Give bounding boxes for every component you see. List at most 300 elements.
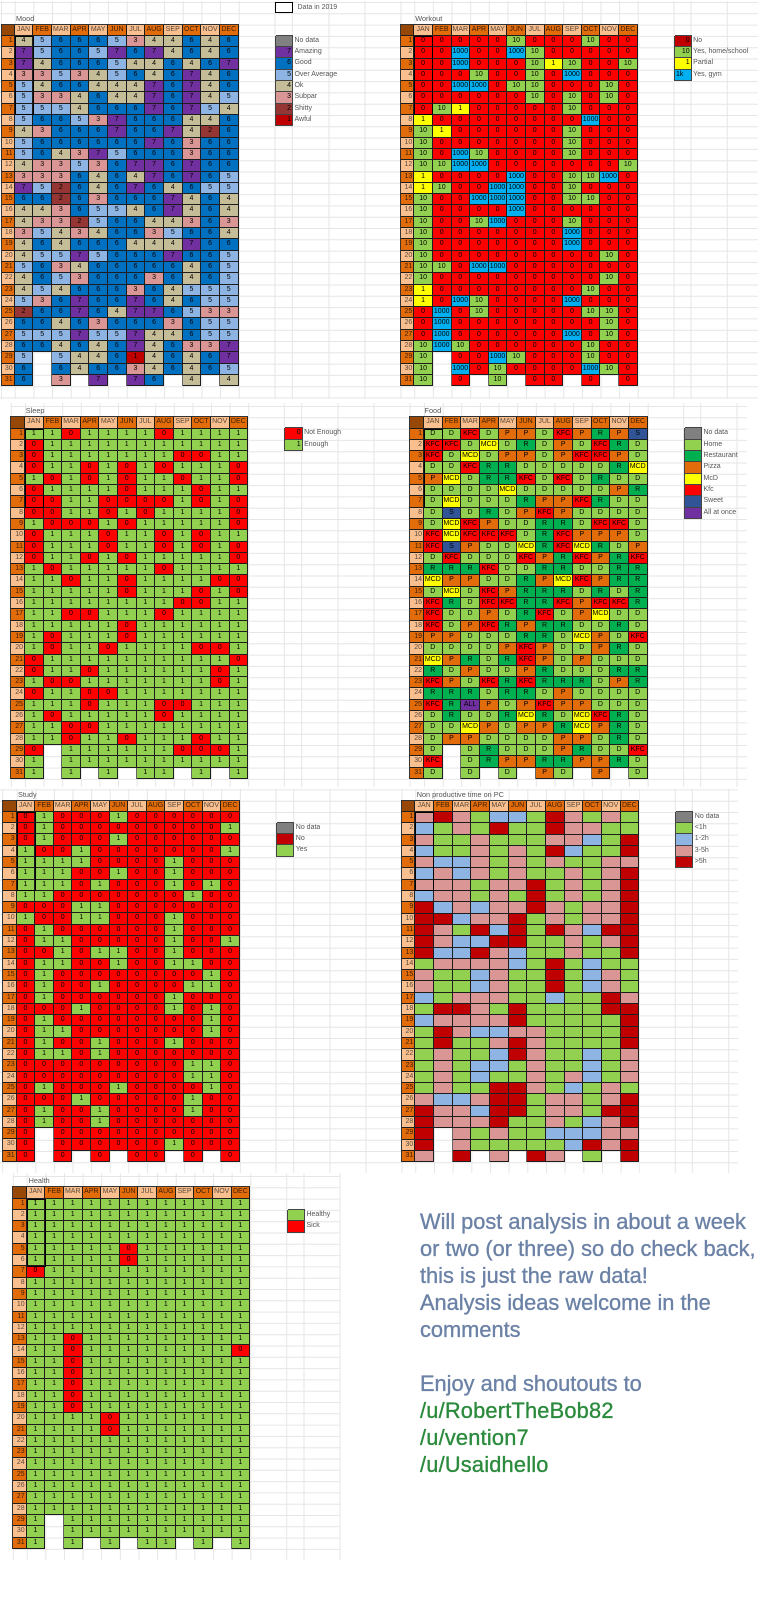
health calendar table: 1 xyxy=(89,1493,93,1500)
mood calendar table: 6 xyxy=(115,353,119,360)
health calendar table: 1 xyxy=(108,1267,112,1274)
food calendar table: MCD xyxy=(462,723,478,730)
workout calendar table: 10 xyxy=(568,195,576,202)
study calendar table: 0 xyxy=(191,824,195,831)
health calendar table: 1 xyxy=(183,1380,186,1387)
food calendar table: 29 xyxy=(414,746,422,753)
health calendar table: 1 xyxy=(238,1448,242,1455)
health calendar table: 1 xyxy=(127,1471,131,1478)
food calendar table: R xyxy=(617,554,622,561)
health calendar table: 1 xyxy=(145,1426,149,1433)
mood calendar table: 6 xyxy=(96,139,100,146)
legend: mood: Amazing xyxy=(294,48,322,55)
health calendar table: 1 xyxy=(145,1290,149,1297)
health calendar table: 1 xyxy=(201,1527,205,1534)
mood calendar table: 6 xyxy=(115,184,119,191)
sleep calendar table: 1 xyxy=(143,735,147,742)
health calendar table: DEC xyxy=(233,1188,248,1195)
workout calendar table: 0 xyxy=(496,37,499,44)
health calendar table: 1 xyxy=(201,1256,205,1263)
food calendar table: 20 xyxy=(414,644,422,651)
food calendar table: R xyxy=(598,497,603,504)
health calendar table: 1 xyxy=(201,1369,205,1376)
workout calendar table: 10 xyxy=(605,365,613,372)
food calendar table: D xyxy=(449,463,454,470)
workout calendar table: 1000 xyxy=(434,342,449,349)
workout calendar table: 0 xyxy=(458,139,462,146)
workout calendar table: 1 xyxy=(408,37,412,44)
study calendar table: 0 xyxy=(116,982,120,989)
study calendar table: 25 xyxy=(7,1084,15,1091)
workout calendar table: 0 xyxy=(570,252,574,259)
food calendar table: APR xyxy=(481,418,496,425)
workout calendar table: 0 xyxy=(514,60,518,67)
workout calendar table: 0 xyxy=(607,139,611,146)
mood calendar table xyxy=(0,24,239,386)
food calendar table: P xyxy=(486,723,491,730)
workout calendar table: 0 xyxy=(607,297,611,304)
health calendar table: 1 xyxy=(52,1346,56,1353)
legend: workout: Yes, home/school xyxy=(693,48,748,55)
food calendar table: R xyxy=(430,667,435,674)
health calendar table: 1 xyxy=(238,1358,242,1365)
study calendar table: 0 xyxy=(191,858,195,865)
workout calendar table: 0 xyxy=(589,48,593,55)
food calendar table: D xyxy=(561,463,566,470)
mood calendar table: 5 xyxy=(227,93,231,100)
food calendar table: KFC xyxy=(556,543,570,550)
study calendar table: 0 xyxy=(209,1039,213,1046)
health calendar table: 1 xyxy=(220,1346,224,1353)
health calendar table: 1 xyxy=(71,1267,75,1274)
non productive time calendar table: 11 xyxy=(406,926,413,933)
legend: food: Restaurant xyxy=(703,452,738,459)
mood calendar table: 3 xyxy=(59,93,63,100)
sleep calendar table: 1 xyxy=(162,633,166,640)
mood calendar table: 6 xyxy=(96,274,100,281)
workout calendar table: 0 xyxy=(477,252,481,259)
food calendar table: P xyxy=(579,656,584,663)
workout calendar table: 0 xyxy=(570,37,574,44)
sleep calendar table: 1 xyxy=(199,656,203,663)
health calendar table: 1 xyxy=(164,1426,168,1433)
mood calendar table: 7 xyxy=(152,308,156,315)
workout calendar table: 1 xyxy=(421,184,425,191)
study calendar table: 0 xyxy=(154,1118,158,1125)
mood calendar table: 21 xyxy=(5,263,13,270)
study calendar table: 0 xyxy=(135,892,139,899)
food calendar table: R xyxy=(542,667,547,674)
mood calendar table: 6 xyxy=(189,48,193,55)
health calendar table: 8 xyxy=(21,1279,25,1286)
mood calendar table: 3 xyxy=(9,60,13,67)
mood calendar table: 6 xyxy=(59,37,63,44)
health calendar table: 1 xyxy=(52,1211,56,1218)
sleep calendar table: 0 xyxy=(125,588,129,595)
health calendar table: 1 xyxy=(183,1233,186,1240)
workout calendar table: 0 xyxy=(496,173,499,180)
mood calendar table: 6 xyxy=(115,139,119,146)
mood calendar table: 6 xyxy=(59,82,63,89)
health calendar table: 1 xyxy=(183,1335,186,1342)
study calendar table: 1 xyxy=(42,1039,46,1046)
study calendar table: 21 xyxy=(7,1039,15,1046)
study calendar table: 1 xyxy=(42,1084,46,1091)
mood calendar table: 7 xyxy=(78,297,81,304)
study calendar table: 0 xyxy=(98,971,102,978)
food calendar table: KFC xyxy=(575,554,589,561)
food calendar table: R xyxy=(505,678,510,685)
sleep calendar table: 1 xyxy=(125,656,129,663)
mood calendar table: 4 xyxy=(9,71,13,78)
health calendar table: 0 xyxy=(71,1369,75,1376)
sleep calendar table: 0 xyxy=(218,644,222,651)
legend: sleep: 1 xyxy=(297,441,301,448)
workout calendar table: 10 xyxy=(587,173,594,180)
mood calendar table: 3 xyxy=(40,161,44,168)
food calendar table: D xyxy=(505,701,510,708)
shoutout usernames xyxy=(420,1398,614,1477)
health calendar table: 7 xyxy=(21,1267,25,1274)
food calendar table: 13 xyxy=(414,565,422,572)
food calendar table: D xyxy=(468,678,473,685)
mood calendar table: 4 xyxy=(171,48,175,55)
sleep calendar table: 1 xyxy=(69,486,73,493)
food calendar table: D xyxy=(598,689,603,696)
workout calendar table: 1000 xyxy=(453,297,468,304)
food calendar table: R xyxy=(523,497,528,504)
mood calendar table: 6 xyxy=(152,376,156,383)
food calendar table: KFC xyxy=(482,588,496,595)
sleep calendar table: 1 xyxy=(143,723,147,730)
study calendar table: 1 xyxy=(98,903,102,910)
food calendar table: KFC xyxy=(482,678,496,685)
health calendar table: 1 xyxy=(108,1392,112,1399)
study calendar table: 0 xyxy=(116,1129,120,1136)
sleep calendar table: 1 xyxy=(143,486,147,493)
food calendar table: MCD xyxy=(592,610,608,617)
health calendar table: 1 xyxy=(183,1414,186,1421)
sleep calendar table: 0 xyxy=(181,599,184,606)
food calendar table: R xyxy=(449,565,454,572)
mood calendar table: 6 xyxy=(171,274,175,281)
workout calendar table: 0 xyxy=(477,93,481,100)
health calendar table: 1 xyxy=(34,1392,37,1399)
health calendar table: 1 xyxy=(71,1426,75,1433)
legend: mood: 5 xyxy=(287,71,291,78)
workout calendar table: 0 xyxy=(440,240,444,247)
study calendar table: 1 xyxy=(191,1073,195,1080)
workout calendar table: 1000 xyxy=(453,150,468,157)
workout calendar table: SEP xyxy=(565,26,579,33)
sleep calendar table: 1 xyxy=(125,644,129,651)
food calendar table: P xyxy=(561,701,566,708)
workout calendar table: 0 xyxy=(551,48,555,55)
study calendar table: 0 xyxy=(172,1095,176,1102)
study calendar table: 0 xyxy=(228,948,232,955)
study calendar table: 0 xyxy=(116,914,120,921)
workout calendar table: 0 xyxy=(626,48,630,55)
sleep calendar table: 1 xyxy=(181,723,184,730)
study calendar table: 0 xyxy=(116,892,120,899)
study calendar table: 0 xyxy=(116,881,120,888)
sleep calendar table: 0 xyxy=(106,689,110,696)
mood calendar table: 3 xyxy=(189,150,193,157)
food calendar table: R xyxy=(449,599,454,606)
mood calendar table: 6 xyxy=(40,274,44,281)
legend: non productive time xyxy=(675,812,719,868)
sleep calendar table: 1 xyxy=(32,588,36,595)
legend: food xyxy=(684,428,738,519)
sleep calendar table: 1 xyxy=(143,565,147,572)
mood calendar table: 4 xyxy=(227,105,231,112)
mood calendar table: 23 xyxy=(5,286,13,293)
mood calendar table: 7 xyxy=(171,195,175,202)
study calendar table: 1 xyxy=(172,914,176,921)
mood calendar table: SEP xyxy=(166,26,180,33)
health calendar table: 1 xyxy=(108,1256,112,1263)
workout calendar table: 1000 xyxy=(564,297,580,304)
legend: workout: Yes, gym xyxy=(693,71,722,78)
food calendar table: P xyxy=(561,452,566,459)
health calendar table: 1 xyxy=(71,1222,75,1229)
mood calendar table: 5 xyxy=(227,286,231,293)
sleep calendar table: 1 xyxy=(32,701,36,708)
legend: mood: 7 xyxy=(287,48,291,55)
mood calendar table: 5 xyxy=(59,331,63,338)
mood calendar table: 5 xyxy=(227,184,231,191)
food calendar table: D xyxy=(635,768,640,776)
health calendar table: 1 xyxy=(34,1482,37,1489)
food calendar table: R xyxy=(635,667,640,674)
legend: study: No xyxy=(296,835,305,842)
food calendar table: P xyxy=(505,757,510,764)
food calendar table: KFC xyxy=(519,678,533,685)
mood calendar table: 7 xyxy=(189,240,193,247)
workout calendar table: 0 xyxy=(477,127,481,134)
workout calendar table: 0 xyxy=(458,331,462,338)
food calendar table: D xyxy=(579,622,584,629)
sleep calendar table: 1 xyxy=(69,712,73,719)
mood calendar table: 6 xyxy=(78,60,81,67)
sleep calendar table: 1 xyxy=(181,610,184,617)
sleep calendar table: 1 xyxy=(162,723,166,730)
sleep calendar table: 1 xyxy=(181,667,184,674)
workout calendar table: 0 xyxy=(533,252,537,259)
study calendar table: 0 xyxy=(154,847,158,854)
health calendar table: 1 xyxy=(34,1505,37,1512)
food calendar table: D xyxy=(542,452,547,459)
workout calendar table: 0 xyxy=(440,71,444,78)
workout calendar table: 0 xyxy=(626,308,630,315)
study calendar table: 1 xyxy=(24,869,27,876)
non productive time calendar table: 27 xyxy=(406,1107,413,1114)
sleep calendar table: 0 xyxy=(218,576,222,583)
study calendar table: 11 xyxy=(7,926,15,933)
food calendar table: P xyxy=(598,554,603,561)
study calendar table: 1 xyxy=(209,1073,213,1080)
health calendar table: 1 xyxy=(89,1426,93,1433)
food calendar table: D xyxy=(542,746,547,753)
study calendar table: 0 xyxy=(79,1107,83,1114)
mood calendar table: 4 xyxy=(40,60,44,67)
sleep calendar table: 1 xyxy=(32,768,36,776)
legend: mood: 6 xyxy=(287,59,291,66)
mood calendar table: 6 xyxy=(115,286,119,293)
mood calendar table: 4 xyxy=(40,82,44,89)
sleep calendar table: 1 xyxy=(236,565,240,572)
study calendar table: 1 xyxy=(209,1005,213,1012)
mood calendar table: 6 xyxy=(78,139,81,146)
study calendar table: 0 xyxy=(61,847,65,854)
health calendar table: 1 xyxy=(127,1403,131,1410)
sleep calendar table: 1 xyxy=(32,757,36,764)
food calendar table: R xyxy=(617,723,622,730)
food calendar table: D xyxy=(505,441,510,448)
mood calendar table: 4 xyxy=(152,218,156,225)
food calendar table: R xyxy=(523,441,528,448)
health calendar table: 1 xyxy=(183,1301,186,1308)
study calendar table: 0 xyxy=(24,824,27,831)
sleep calendar table: 1 xyxy=(162,768,166,776)
sleep calendar table: 1 xyxy=(69,452,73,459)
food calendar table: D xyxy=(486,712,491,719)
food calendar table: R xyxy=(617,565,622,572)
workout calendar table: 0 xyxy=(533,263,537,270)
study calendar table: 0 xyxy=(154,1005,158,1012)
workout calendar table: 0 xyxy=(458,376,462,383)
food calendar table: D xyxy=(468,441,473,448)
mood calendar table: 6 xyxy=(115,161,119,168)
study calendar table: 0 xyxy=(98,1005,102,1012)
health calendar table: 0 xyxy=(71,1403,75,1410)
mood calendar table: 6 xyxy=(78,82,81,89)
workout calendar table: 0 xyxy=(589,319,593,326)
workout calendar table: 0 xyxy=(514,93,518,100)
health calendar table: 1 xyxy=(201,1233,205,1240)
health calendar table: 1 xyxy=(71,1448,75,1455)
panel: mood xyxy=(1,14,337,386)
health calendar table: 1 xyxy=(164,1233,168,1240)
workout calendar table: 0 xyxy=(551,116,555,123)
food calendar table: R xyxy=(617,712,622,719)
mood calendar table: 6 xyxy=(22,376,25,383)
food calendar table: KFC xyxy=(538,509,552,516)
food calendar table: 15 xyxy=(414,588,422,595)
study calendar table: 0 xyxy=(116,1073,120,1080)
study calendar table: 1 xyxy=(228,847,232,854)
study calendar table: 1 xyxy=(61,1050,65,1057)
mood calendar table: 6 xyxy=(115,274,119,281)
study calendar table: 0 xyxy=(154,994,158,1001)
study calendar table: 0 xyxy=(42,948,46,955)
legend: food: Sweet xyxy=(703,497,723,504)
workout calendar table: 0 xyxy=(477,105,481,112)
workout calendar table: 10 xyxy=(568,184,576,191)
health calendar table: 1 xyxy=(71,1471,75,1478)
mood calendar table: 6 xyxy=(152,286,156,293)
study calendar table: MAR xyxy=(55,802,70,808)
study calendar table: 0 xyxy=(116,1118,120,1125)
study calendar table: 1 xyxy=(24,858,27,865)
study calendar table: 0 xyxy=(191,1152,195,1159)
workout calendar table: 0 xyxy=(607,37,611,44)
food calendar table: R xyxy=(542,599,547,606)
sleep calendar table: 1 xyxy=(106,633,110,640)
mood calendar table: 6 xyxy=(115,240,119,247)
health calendar table: 1 xyxy=(145,1301,149,1308)
workout calendar table: 0 xyxy=(496,319,499,326)
study calendar table: 0 xyxy=(209,903,213,910)
study calendar table: 0 xyxy=(61,892,65,899)
workout calendar table: 10 xyxy=(587,286,594,293)
workout calendar table: 0 xyxy=(551,93,555,100)
health calendar table: 1 xyxy=(89,1267,93,1274)
health calendar table: 1 xyxy=(183,1516,186,1523)
health calendar table: 1 xyxy=(127,1267,131,1274)
mood calendar table: 6 xyxy=(171,139,175,146)
study calendar table: 1 xyxy=(42,835,46,842)
health calendar table: 1 xyxy=(127,1369,131,1376)
health calendar table: 1 xyxy=(89,1222,93,1229)
sleep calendar table: 1 xyxy=(143,554,147,561)
mood calendar table: 6 xyxy=(134,71,137,78)
food calendar table: P xyxy=(468,622,472,629)
food calendar table: P xyxy=(579,599,584,606)
food calendar table: KFC xyxy=(444,554,458,561)
food calendar table: R xyxy=(505,622,510,629)
sleep calendar table: 1 xyxy=(236,701,240,708)
sleep calendar table: 1 xyxy=(69,509,73,516)
health calendar table: 1 xyxy=(164,1279,168,1286)
workout calendar table: 0 xyxy=(570,82,574,89)
health calendar table: 1 xyxy=(108,1245,112,1252)
food calendar table: R xyxy=(561,588,566,595)
sleep calendar table: 1 xyxy=(125,599,129,606)
health calendar table: 1 xyxy=(127,1437,131,1444)
workout calendar table: 0 xyxy=(496,127,499,134)
food calendar table: R xyxy=(561,757,566,764)
sleep calendar table: 1 xyxy=(162,656,166,663)
mood calendar table: 31 xyxy=(5,376,13,383)
food calendar table: P xyxy=(486,610,491,617)
sleep calendar table: 1 xyxy=(125,689,129,696)
workout calendar table: 0 xyxy=(477,173,481,180)
workout calendar table: 0 xyxy=(458,319,462,326)
sleep calendar table: 1 xyxy=(236,678,240,685)
sleep calendar table: 1 xyxy=(162,588,166,595)
mood calendar table: 6 xyxy=(78,206,81,213)
health calendar table: 1 xyxy=(201,1414,205,1421)
study calendar table: 0 xyxy=(209,1129,213,1136)
health calendar table: 1 xyxy=(34,1471,37,1478)
workout calendar table: 0 xyxy=(589,218,593,225)
sleep calendar table: 0 xyxy=(125,463,129,470)
workout calendar table: 0 xyxy=(533,274,537,281)
sleep calendar table: 1 xyxy=(143,520,147,527)
mood calendar table: 6 xyxy=(22,319,25,326)
workout calendar table: OCT xyxy=(583,26,598,33)
health calendar table: 1 xyxy=(52,1471,56,1478)
study calendar table: 0 xyxy=(98,1152,102,1159)
mood calendar table: 6 xyxy=(59,297,63,304)
workout calendar table: 10 xyxy=(531,93,539,100)
food calendar table: D xyxy=(635,610,640,617)
study calendar table: 0 xyxy=(172,1050,176,1057)
study calendar table: 0 xyxy=(116,903,120,910)
workout calendar table: 1000 xyxy=(453,48,468,55)
workout calendar table: 0 xyxy=(533,173,537,180)
